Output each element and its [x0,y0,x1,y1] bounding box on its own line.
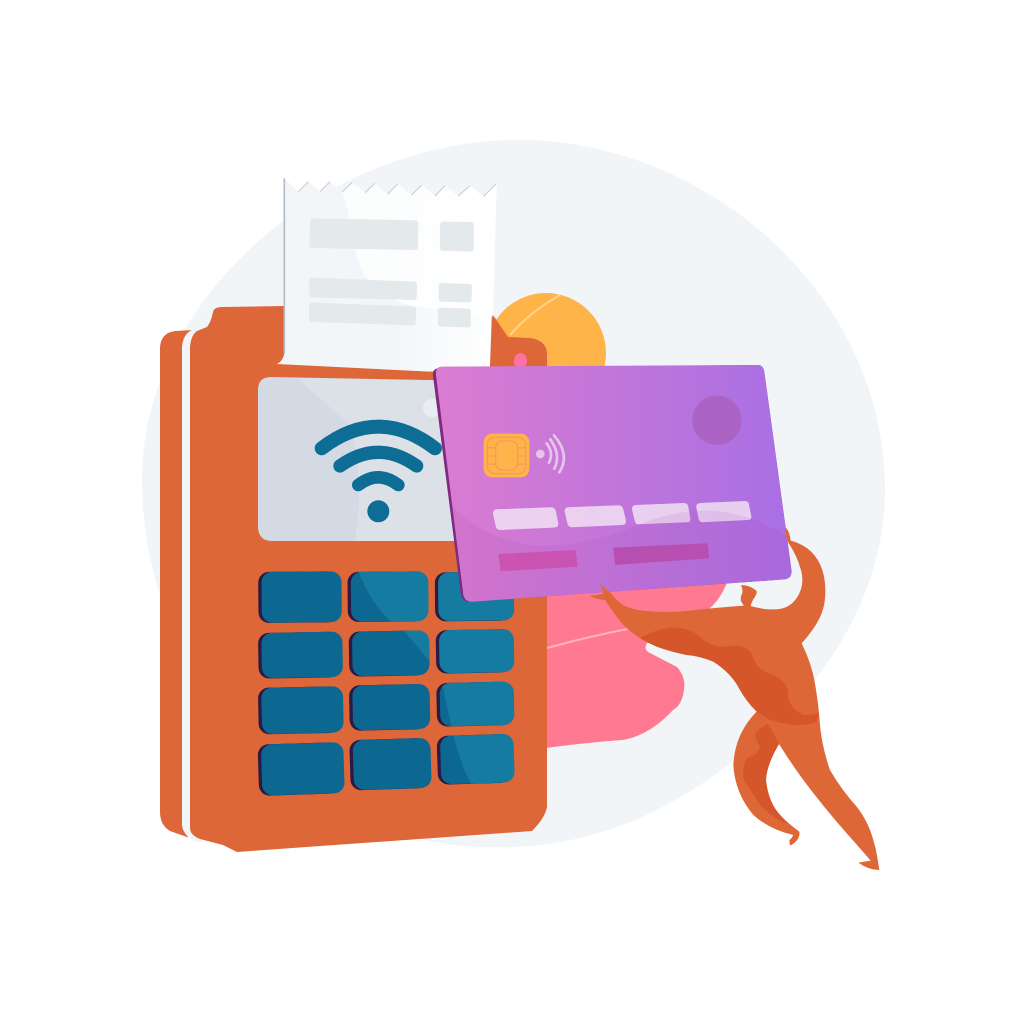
receipt [277,178,497,372]
terminal screen [258,377,480,541]
background blob [142,140,885,847]
terminal body [190,306,547,852]
terminal back panel [160,330,193,838]
emv chip [484,434,529,477]
keypad [257,567,520,800]
card face [436,365,792,602]
white side strip [182,329,202,842]
illustration: contactless card payment [142,140,885,870]
receipt tear edge [298,182,496,197]
credit card [433,365,797,607]
key shadows [258,571,511,796]
card name bars [498,543,709,571]
receipt line items [312,221,471,325]
card lower wave [640,510,750,524]
receipt sheen [342,182,497,317]
card edge [433,365,792,602]
receipt left edge [282,178,287,353]
card emblem circle [692,396,742,445]
payment terminal [160,306,547,852]
screen button [423,399,441,417]
card number fields [493,501,751,530]
pink indicator light [514,353,527,369]
gold coin behind terminal [486,293,606,413]
screen sheen [297,378,480,541]
key faces [257,567,520,800]
contactless symbol [536,435,564,472]
wifi symbol [322,427,435,522]
person holding card [589,527,879,870]
leg shadow [743,724,787,824]
shirt shadow [640,628,819,725]
pink coin blob [530,560,730,750]
figure body [589,527,879,870]
